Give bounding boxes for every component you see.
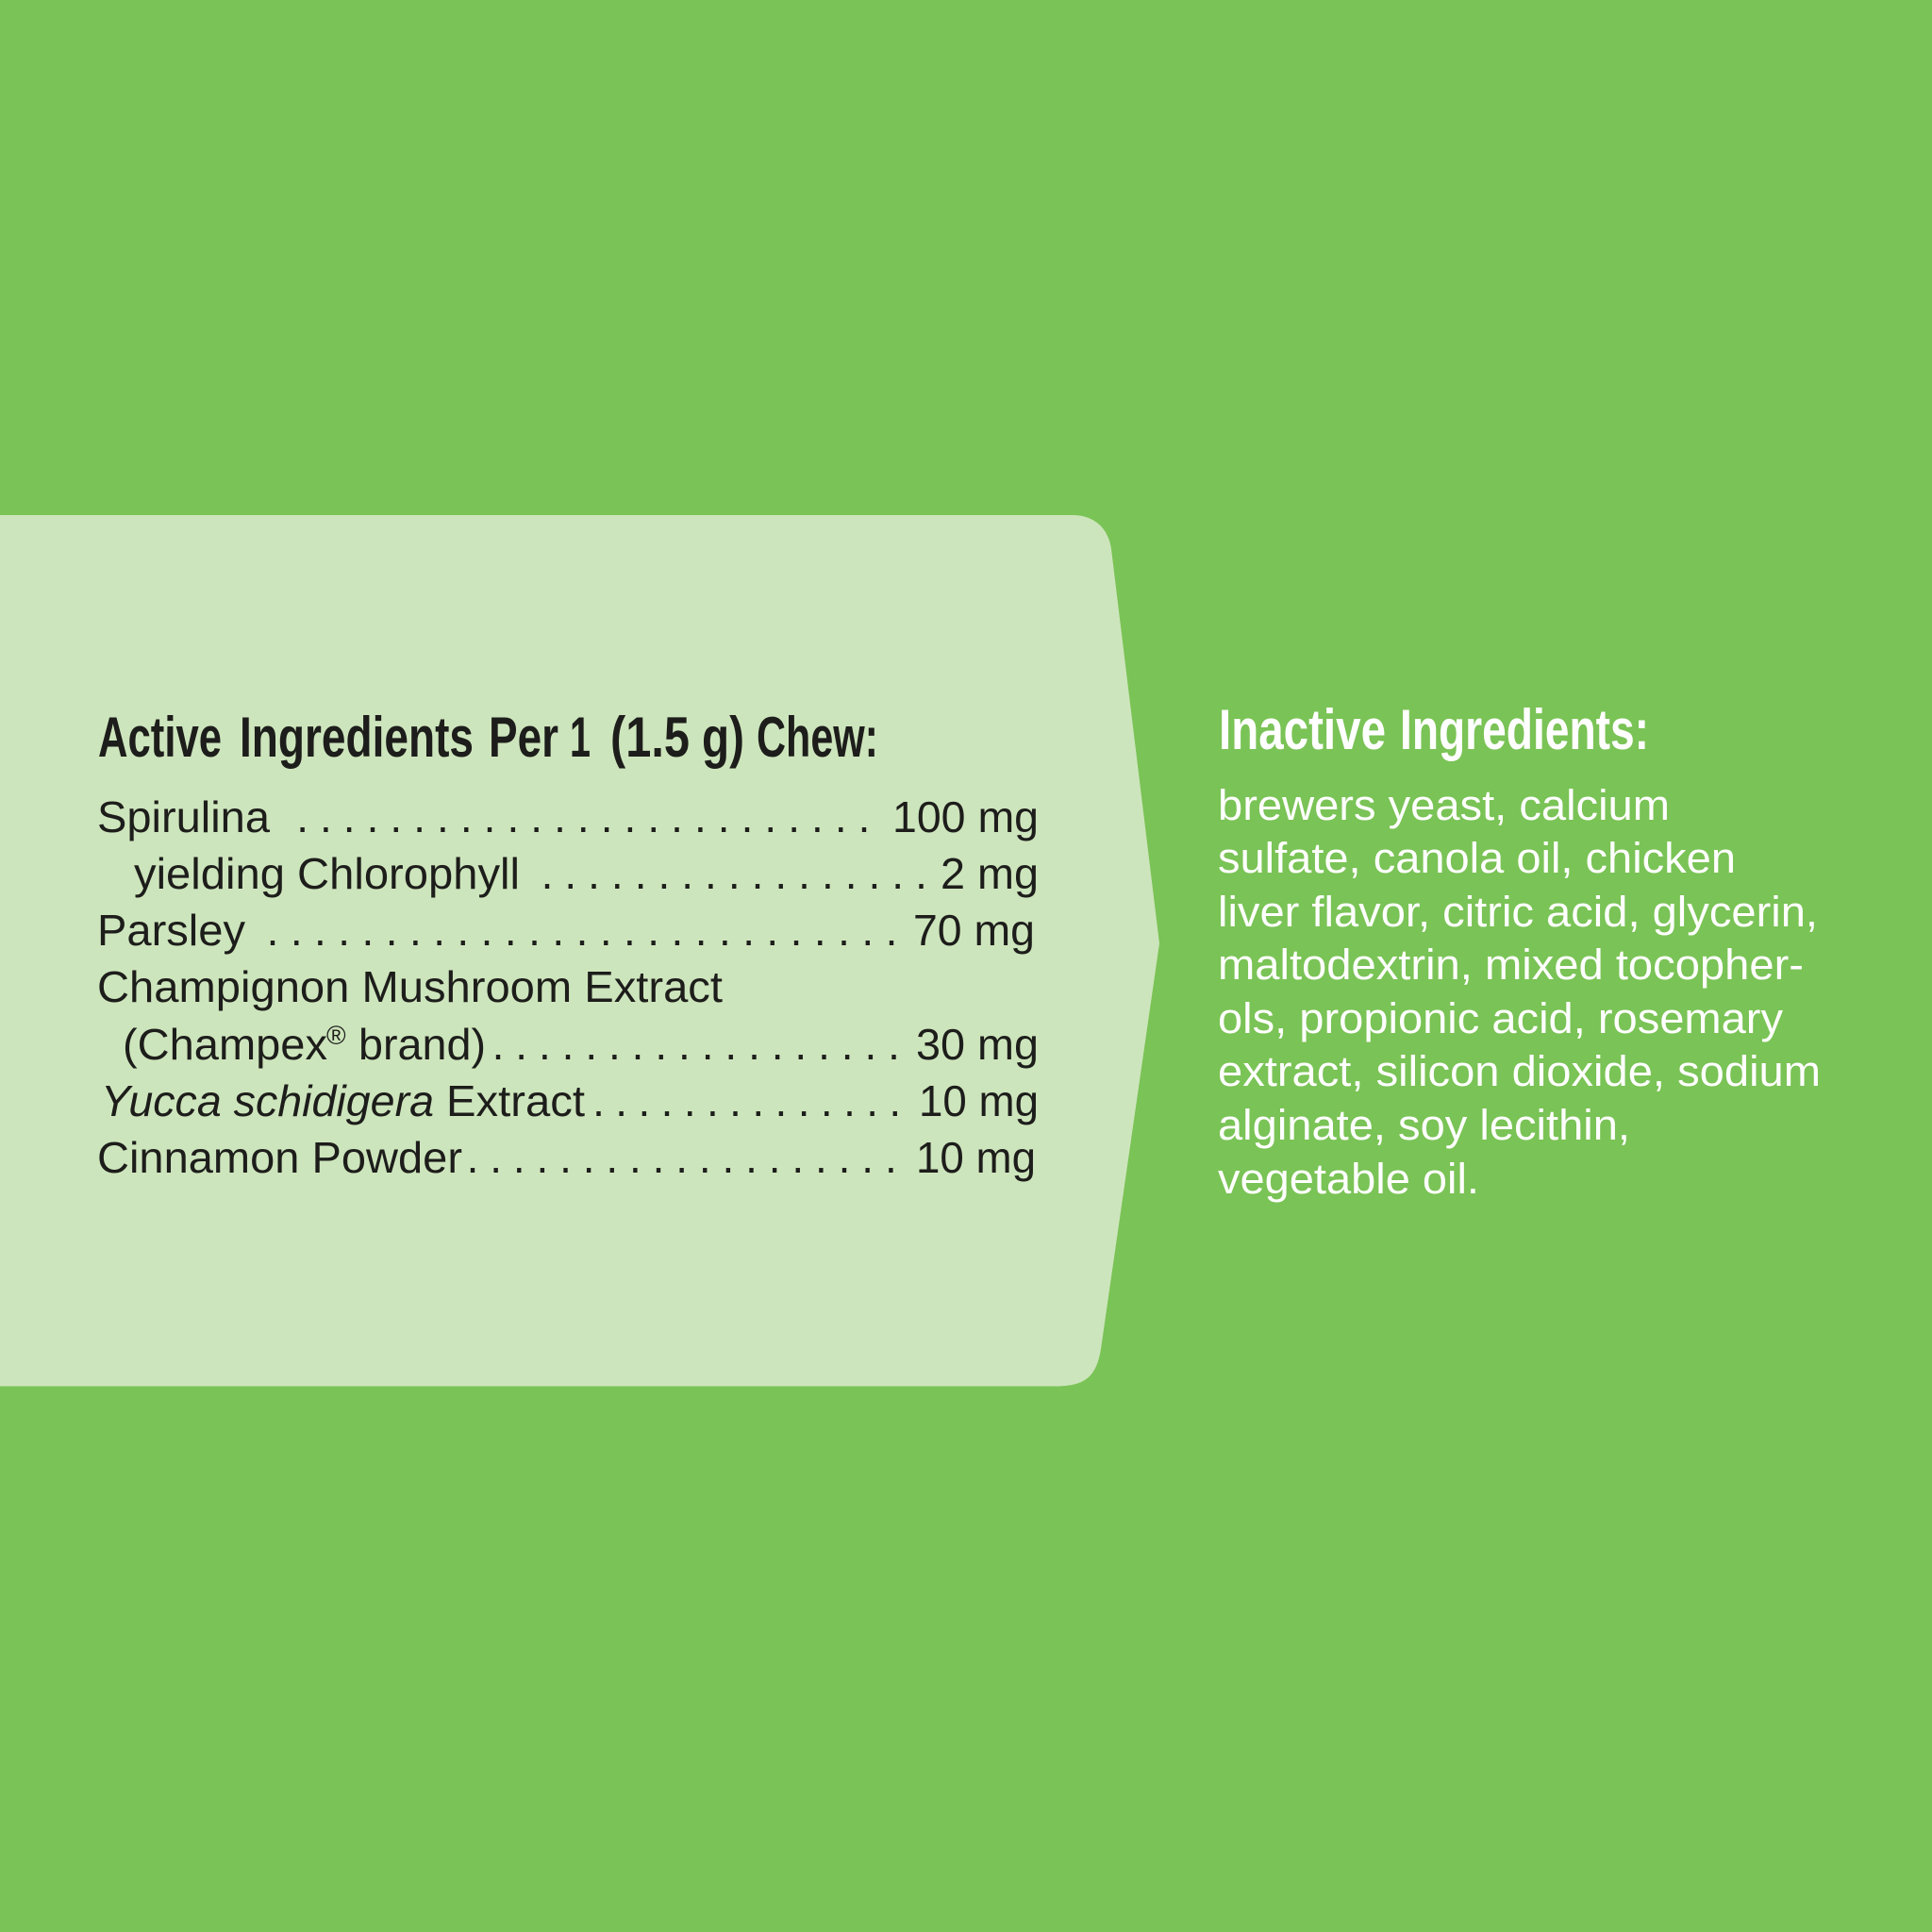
row: yucca schidigera extract: Yucca schidigera (101, 1076, 434, 1125)
row: spirulina: Spirulina (97, 792, 270, 841)
row: chlorophyll: yielding Chlorophyll (134, 849, 520, 898)
row: spirulina: 100 mg (892, 792, 1039, 841)
row: champex brand: (Champex (123, 1020, 327, 1069)
row: cinnamon powder: 10 mg (916, 1133, 1036, 1182)
heading: active ingredients: Active (98, 706, 222, 769)
heading: active ingredients: (1.5 (610, 706, 690, 769)
row: yucca schidigera extract (101, 1076, 1039, 1125)
heading: active ingredients: 1 (570, 706, 591, 769)
row: champex brand: brand) (358, 1020, 486, 1069)
text block: inactive ingredients list: extract, silicon dioxide, sodium (1218, 1047, 1821, 1095)
row: spirulina (97, 792, 1039, 841)
row: chlorophyll (134, 849, 1039, 898)
row: champignon mushroom extract: Champignon Mushroom Extract (97, 962, 723, 1011)
heading: inactive ingredients (1219, 698, 1649, 761)
table: active ingredients list (97, 792, 1039, 1182)
row: parsley: ........................... (267, 906, 909, 955)
row: parsley (97, 906, 1035, 955)
row: chlorophyll: 2 mg (941, 849, 1039, 898)
row: cinnamon powder (97, 1133, 1036, 1182)
row: yucca schidigera extract: 10 mg (919, 1076, 1039, 1125)
row: spirulina: ......................... (296, 792, 881, 841)
row: champex brand: 30 mg (916, 1020, 1039, 1069)
text block: inactive ingredients list: maltodextrin, mixed tocopher- (1218, 941, 1804, 989)
text block: inactive ingredients list (1218, 781, 1821, 1203)
row: yucca schidigera extract: .............. (592, 1076, 912, 1125)
row: parsley: 70 mg (913, 906, 1035, 955)
text block: inactive ingredients list: alginate, soy lecithin, (1218, 1101, 1630, 1149)
row: cinnamon powder: ................... (467, 1133, 908, 1182)
panel: active ingredients arrow shape (0, 515, 1159, 1387)
text block: inactive ingredients list: liver flavor, citric acid, glycerin, (1218, 888, 1818, 936)
row: champex brand: .................. (492, 1020, 911, 1069)
heading: inactive ingredients: Inactive (1219, 698, 1386, 761)
row: champex brand: ® (326, 1021, 346, 1050)
row: cinnamon powder: Cinnamon Powder (97, 1133, 462, 1182)
row: parsley: Parsley (97, 906, 245, 955)
text block: inactive ingredients list: ols, propionic acid, rosemary (1218, 994, 1784, 1042)
heading: active ingredients: Per (489, 706, 558, 769)
heading: active ingredients: Chew: (757, 706, 878, 769)
heading: active ingredients (98, 706, 878, 769)
text block: inactive ingredients list: vegetable oil. (1218, 1155, 1479, 1203)
row: yucca schidigera extract: Extract (446, 1076, 585, 1125)
heading: inactive ingredients: Ingredients: (1400, 698, 1649, 761)
heading: active ingredients: g) (702, 706, 744, 769)
text block: inactive ingredients list: brewers yeast, calcium (1218, 781, 1670, 829)
heading: active ingredients: Ingredients (240, 706, 474, 769)
row: champex brand (123, 1020, 1039, 1069)
text block: inactive ingredients list: sulfate, canola oil, chicken (1218, 834, 1736, 882)
row: chlorophyll: ................. (541, 849, 939, 898)
